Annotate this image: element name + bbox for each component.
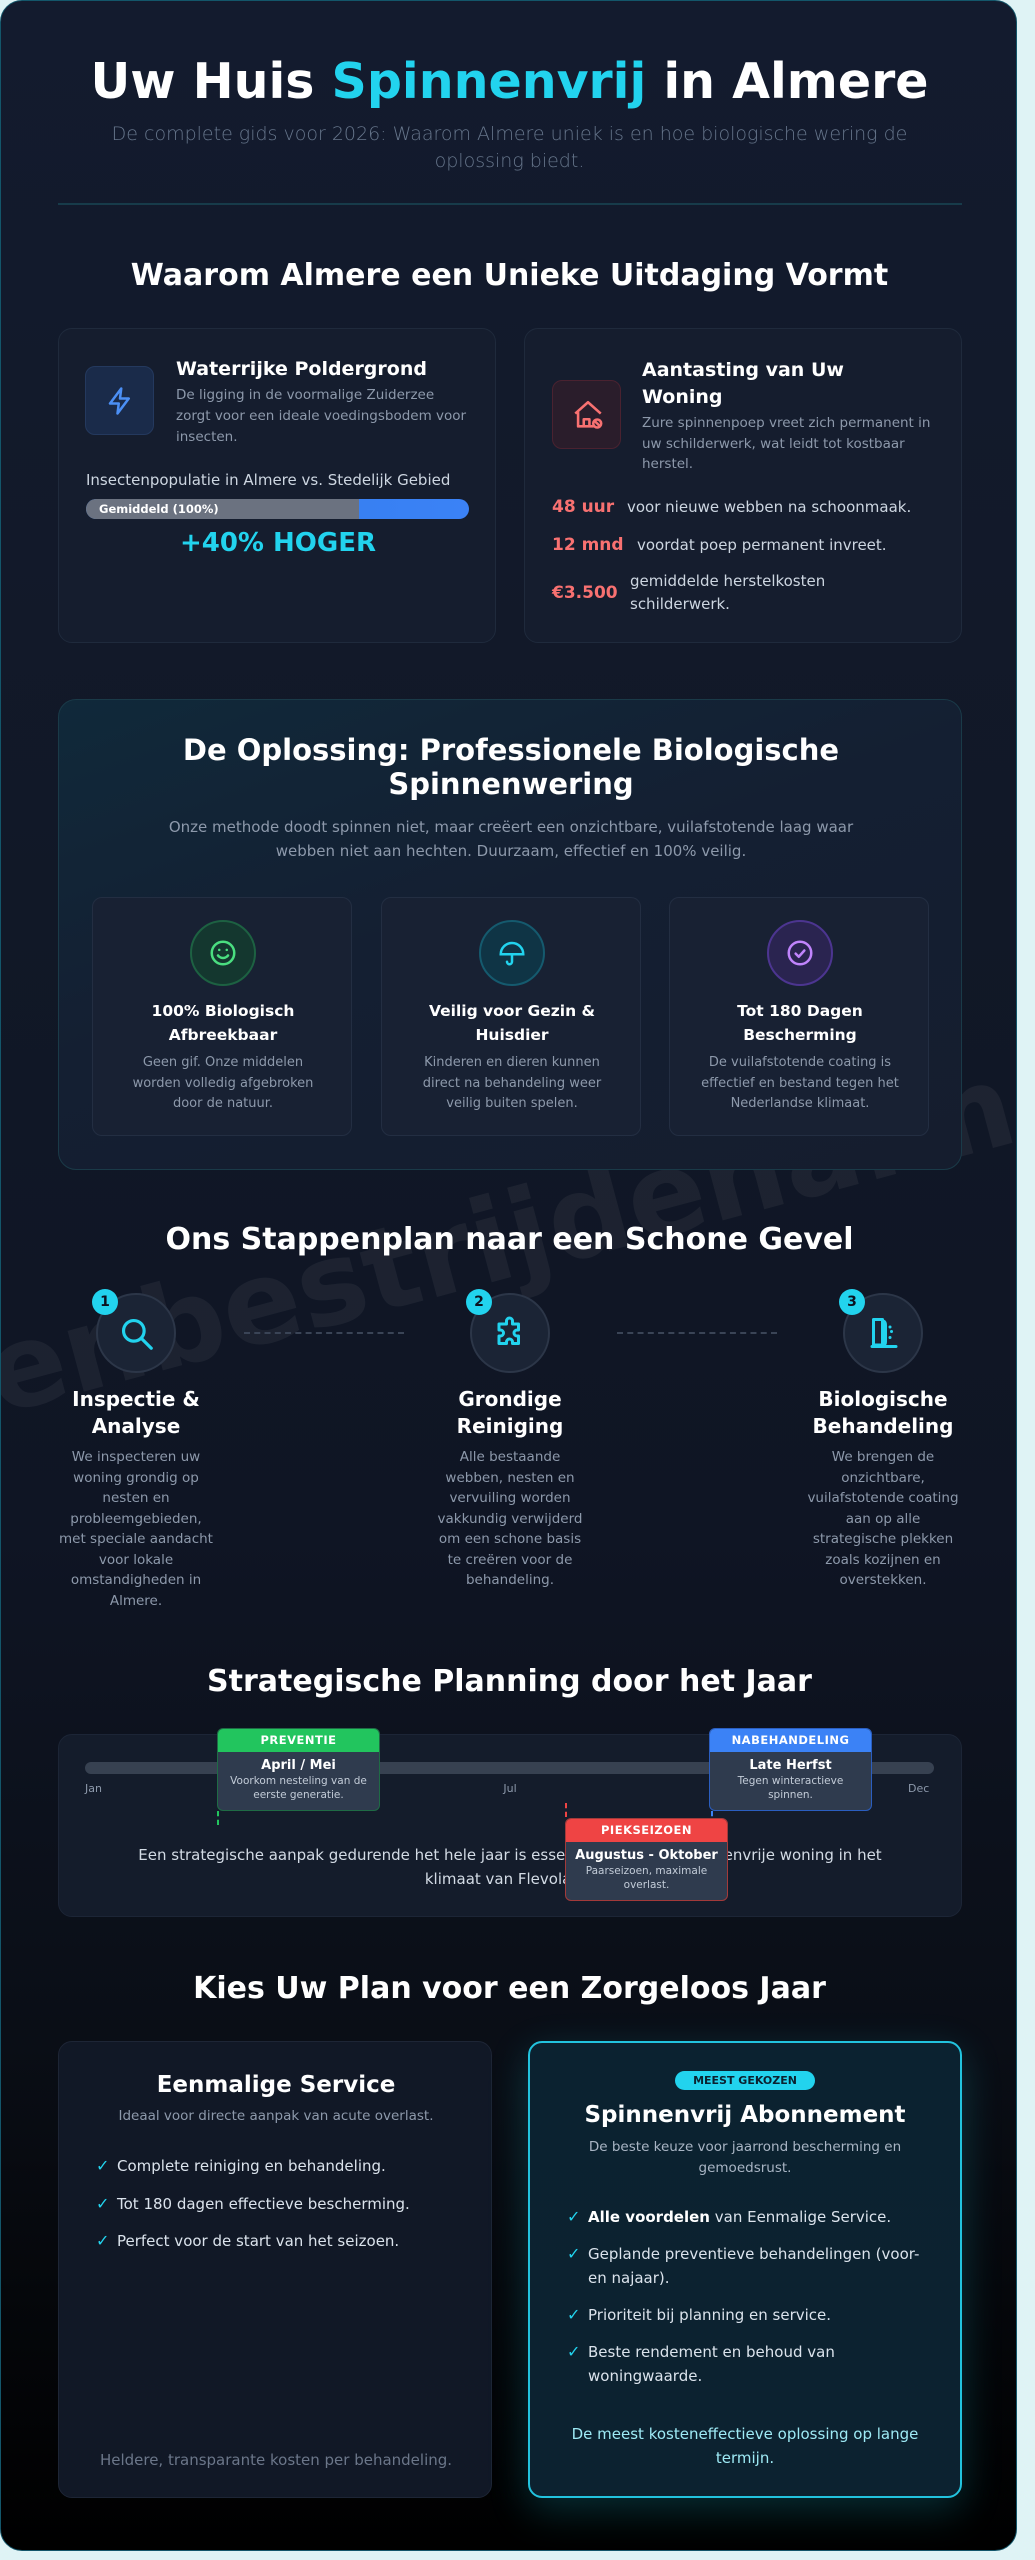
text: klimaat van Flevoland. [425, 1870, 595, 1888]
list: Alle voordelen van Eenmalige Service. [588, 2208, 891, 2226]
card: veilig: Kinderen en dieren kunnen [424, 1055, 600, 1070]
text: Een strategische aanpak gedurende het hele jaar is essentieel voor een spinnenvrije woning in het [138, 1846, 882, 1864]
card: biologisch: 100% Biologisch [152, 1002, 294, 1020]
card: biologisch [92, 897, 352, 1136]
step 3: Biologische [818, 1387, 948, 1411]
callout: piekseizoen: Augustus - Oktober [575, 1848, 718, 1863]
arrow: dashed 2-3 [617, 1332, 777, 1334]
panel: waterrijke poldergrond [58, 328, 496, 643]
text: De ligging in de voormalige Zuiderzee [176, 387, 434, 403]
callout: nabehandeling [709, 1728, 872, 1811]
step 1: We inspecteren uw [72, 1449, 200, 1465]
heading [642, 359, 844, 408]
panel: aantasting woning [524, 328, 962, 643]
heading: Aantasting van Uw [642, 359, 844, 381]
arrow: dashed 1-2 [244, 1332, 404, 1334]
callout: piekseizoen [565, 1818, 728, 1901]
list: ✓ [567, 2305, 580, 2324]
step 3: We brengen de [832, 1449, 934, 1465]
panel: abonnement: termijn. [716, 2449, 774, 2467]
text: insecten. [176, 429, 238, 445]
card: veilig: veilig buiten spelen. [446, 1096, 578, 1111]
step 3: overstekken. [839, 1572, 927, 1588]
list: ✓ [567, 2342, 580, 2361]
panel: abonnement: gemoedsrust. [699, 2160, 791, 2176]
heading: waarom: Waarom Almere een Unieke Uitdaging Vormt [131, 258, 888, 293]
step 2: Grondige [458, 1387, 562, 1411]
stats: 12 mnd [552, 535, 624, 555]
title: Uw Huis Spinnenvrij in Almere [90, 53, 928, 110]
list [96, 2156, 410, 2250]
subtitle: De complete gids voor 2026: Waarom Almere uniek is en hoe biologische wering de oplossing biedt. [112, 123, 907, 172]
panel: abonnement: Spinnenvrij Abonnement [584, 2102, 906, 2128]
badge [675, 2071, 815, 2090]
step 3: 3 [847, 1294, 857, 1310]
stats: 48 uur [552, 497, 614, 517]
callout: nabehandeling: NABEHANDELING [732, 1733, 849, 1747]
card: veilig: direct na behandeling weer [423, 1076, 601, 1090]
step 1: probleemgebieden, [70, 1510, 202, 1526]
step 1: Analyse [92, 1414, 180, 1438]
chart: timeline: Jan [85, 1782, 102, 1795]
panel: timeline [58, 1734, 962, 1917]
card: 180 dagen: Tot 180 Dagen [737, 1002, 863, 1020]
icon: lightning [85, 366, 154, 435]
text: Onze methode doodt spinnen niet, maar creëert een onzichtbare, vuilafstotende laag waar [169, 818, 853, 836]
stats: €3.500 [552, 583, 618, 603]
text [138, 1846, 882, 1888]
heading: Waterrijke Poldergrond [176, 358, 427, 380]
list: Complete reiniging en behandeling. [117, 2157, 386, 2175]
step 1: 1 [100, 1294, 110, 1310]
step 1: Almere. [110, 1592, 162, 1608]
step 2: webben, nesten en [445, 1470, 575, 1486]
step 2: om een schone basis [439, 1531, 581, 1547]
step 1: voor lokale [99, 1552, 173, 1568]
bar chart [86, 499, 469, 519]
card: 180 dagen: Bescherming [743, 1026, 857, 1044]
card: veilig: Huisdier [475, 1026, 549, 1044]
step 1: Inspectie & [72, 1387, 200, 1411]
panel: eenmalige service: Heldere, transparante kosten per behandeling. [100, 2451, 452, 2469]
callout: preventie: April / Mei [261, 1758, 336, 1773]
card: veilig [381, 897, 641, 1136]
callout: piekseizoen: Paarseizoen, maximale [586, 1865, 707, 1877]
step 1 [59, 1289, 213, 1608]
step 2: vakkundig verwijderd [438, 1510, 582, 1526]
step 2: te creëren voor de [448, 1552, 572, 1568]
callout: preventie: Voorkom nesteling van de [230, 1775, 367, 1787]
list: ✓ [567, 2244, 580, 2263]
callout: nabehandeling: Late Herfst [749, 1758, 832, 1773]
step 3 [807, 1289, 959, 1588]
stats [552, 497, 911, 613]
step 3: aan op alle [846, 1510, 920, 1526]
panel: de oplossing [58, 699, 962, 1170]
list: ✓ [96, 2194, 109, 2213]
step 3: Behandeling [813, 1414, 953, 1438]
card: veilig: Veilig voor Gezin & [429, 1002, 595, 1020]
card: biologisch: Afbreekbaar [169, 1026, 277, 1044]
step 3: vuilafstotende coating [807, 1490, 959, 1506]
bar chart label: Insectenpopulatie in Almere vs. Stedelijk Gebied [86, 471, 450, 489]
callout: nabehandeling: Tegen winteractieve [738, 1775, 843, 1787]
callout: preventie [217, 1728, 380, 1811]
card: 180 dagen [669, 897, 929, 1136]
list: Perfect voor de start van het seizoen. [117, 2232, 399, 2250]
chart: timeline [84, 1728, 934, 1901]
panel: abonnement: De meest kosteneffectieve oplossing op lange [572, 2425, 918, 2443]
list: ✓ [96, 2156, 109, 2175]
list: Prioriteit bij planning en service. [588, 2306, 831, 2324]
card: biologisch: Geen gif. Onze middelen [143, 1055, 303, 1070]
list: Beste rendement en behoud van [588, 2343, 835, 2361]
panel: eenmalige service: Eenmalige Service [157, 2072, 395, 2098]
chart: timeline: Jul [503, 1782, 517, 1795]
text: zorgt voor een ideale voedingsbodem voor [176, 408, 466, 424]
stats: schilderwerk. [630, 595, 730, 613]
list: en najaar). [588, 2269, 670, 2287]
list: ✓ [567, 2207, 580, 2226]
heading: planning: Strategische Planning door het Jaar [207, 1664, 812, 1699]
step 1: woning grondig op [73, 1470, 199, 1486]
icon: house [552, 380, 621, 449]
stat: +40%: +40% HOGER [180, 528, 376, 558]
heading: De Oplossing: Professionele Biologische [183, 733, 839, 767]
icon: umbrella [479, 920, 545, 986]
chart: timeline: Dec [908, 1782, 929, 1795]
stats: gemiddelde herstelkosten [630, 572, 825, 590]
list: woningwaarde. [588, 2367, 702, 2385]
callout: preventie: eerste generatie. [253, 1789, 344, 1801]
heading: Woning [642, 386, 722, 408]
card: 180 dagen: De vuilafstotende coating is [709, 1055, 891, 1070]
step 2 [438, 1289, 582, 1588]
heading: stappenplan: Ons Stappenplan naar een Schone Gevel [165, 1222, 854, 1257]
badge: MEEST GEKOZEN [693, 2074, 797, 2087]
step 3: strategische plekken [813, 1531, 953, 1547]
icon: door/coating [843, 1293, 923, 1373]
card: 180 dagen: Nederlandse klimaat. [731, 1096, 869, 1111]
card: 180 dagen: effectief en bestand tegen het [701, 1076, 899, 1090]
list: Tot 180 dagen effectieve bescherming. [117, 2195, 410, 2213]
step 3: zoals kozijnen en [825, 1552, 941, 1568]
list: Geplande preventieve behandelingen (voor- [588, 2245, 919, 2263]
panel: abonnement: De beste keuze voor jaarrond bescherming en [589, 2139, 901, 2155]
step 2: 2 [474, 1294, 484, 1310]
list: ✓ [96, 2231, 109, 2250]
step 2: Reiniging [457, 1414, 563, 1438]
icon: check circle [767, 920, 833, 986]
callout: piekseizoen: overlast. [624, 1879, 669, 1891]
stats: voordat poep permanent invreet. [637, 536, 887, 554]
heading [183, 733, 839, 801]
step 2: Alle bestaande [460, 1449, 560, 1465]
icon: puzzle [470, 1293, 550, 1373]
heading: kies plan: Kies Uw Plan voor een Zorgeloos Jaar [193, 1971, 826, 2006]
step 1: met speciale aandacht [59, 1531, 213, 1547]
step 1: omstandigheden in [71, 1572, 201, 1588]
stats: voor nieuwe webben na schoonmaak. [627, 498, 911, 516]
step 1: nesten en [102, 1490, 170, 1506]
card: biologisch: worden volledig afgebroken [133, 1076, 313, 1090]
text [176, 387, 466, 445]
step 3: onzichtbare, [841, 1470, 925, 1486]
callout: preventie: PREVENTIE [260, 1733, 336, 1747]
heading: Spinnenwering [388, 767, 634, 801]
panel: eenmalige service: Ideaal voor directe aanpak van acute overlast. [118, 2108, 434, 2124]
text: Zure spinnenpoep vreet zich permanent in uw schilderwerk, wat leidt tot kostbaar herstel. [642, 415, 930, 472]
card: biologisch: door de natuur. [173, 1096, 273, 1111]
list [567, 2207, 919, 2385]
callout: nabehandeling: spinnen. [768, 1789, 813, 1801]
bar chart: Gemiddeld (100%) [99, 502, 219, 516]
icon: search [96, 1293, 176, 1373]
icon: smile [190, 920, 256, 986]
text: webben niet aan hechten. Duurzaam, effectief en 100% veilig. [276, 842, 746, 860]
panel: abonnement [528, 2041, 962, 2498]
step 2: behandeling. [466, 1572, 554, 1588]
panel: eenmalige service [58, 2041, 492, 2498]
callout: piekseizoen: PIEKSEIZOEN [601, 1823, 692, 1837]
text [169, 818, 854, 860]
step 2: vervuiling worden [449, 1490, 571, 1506]
